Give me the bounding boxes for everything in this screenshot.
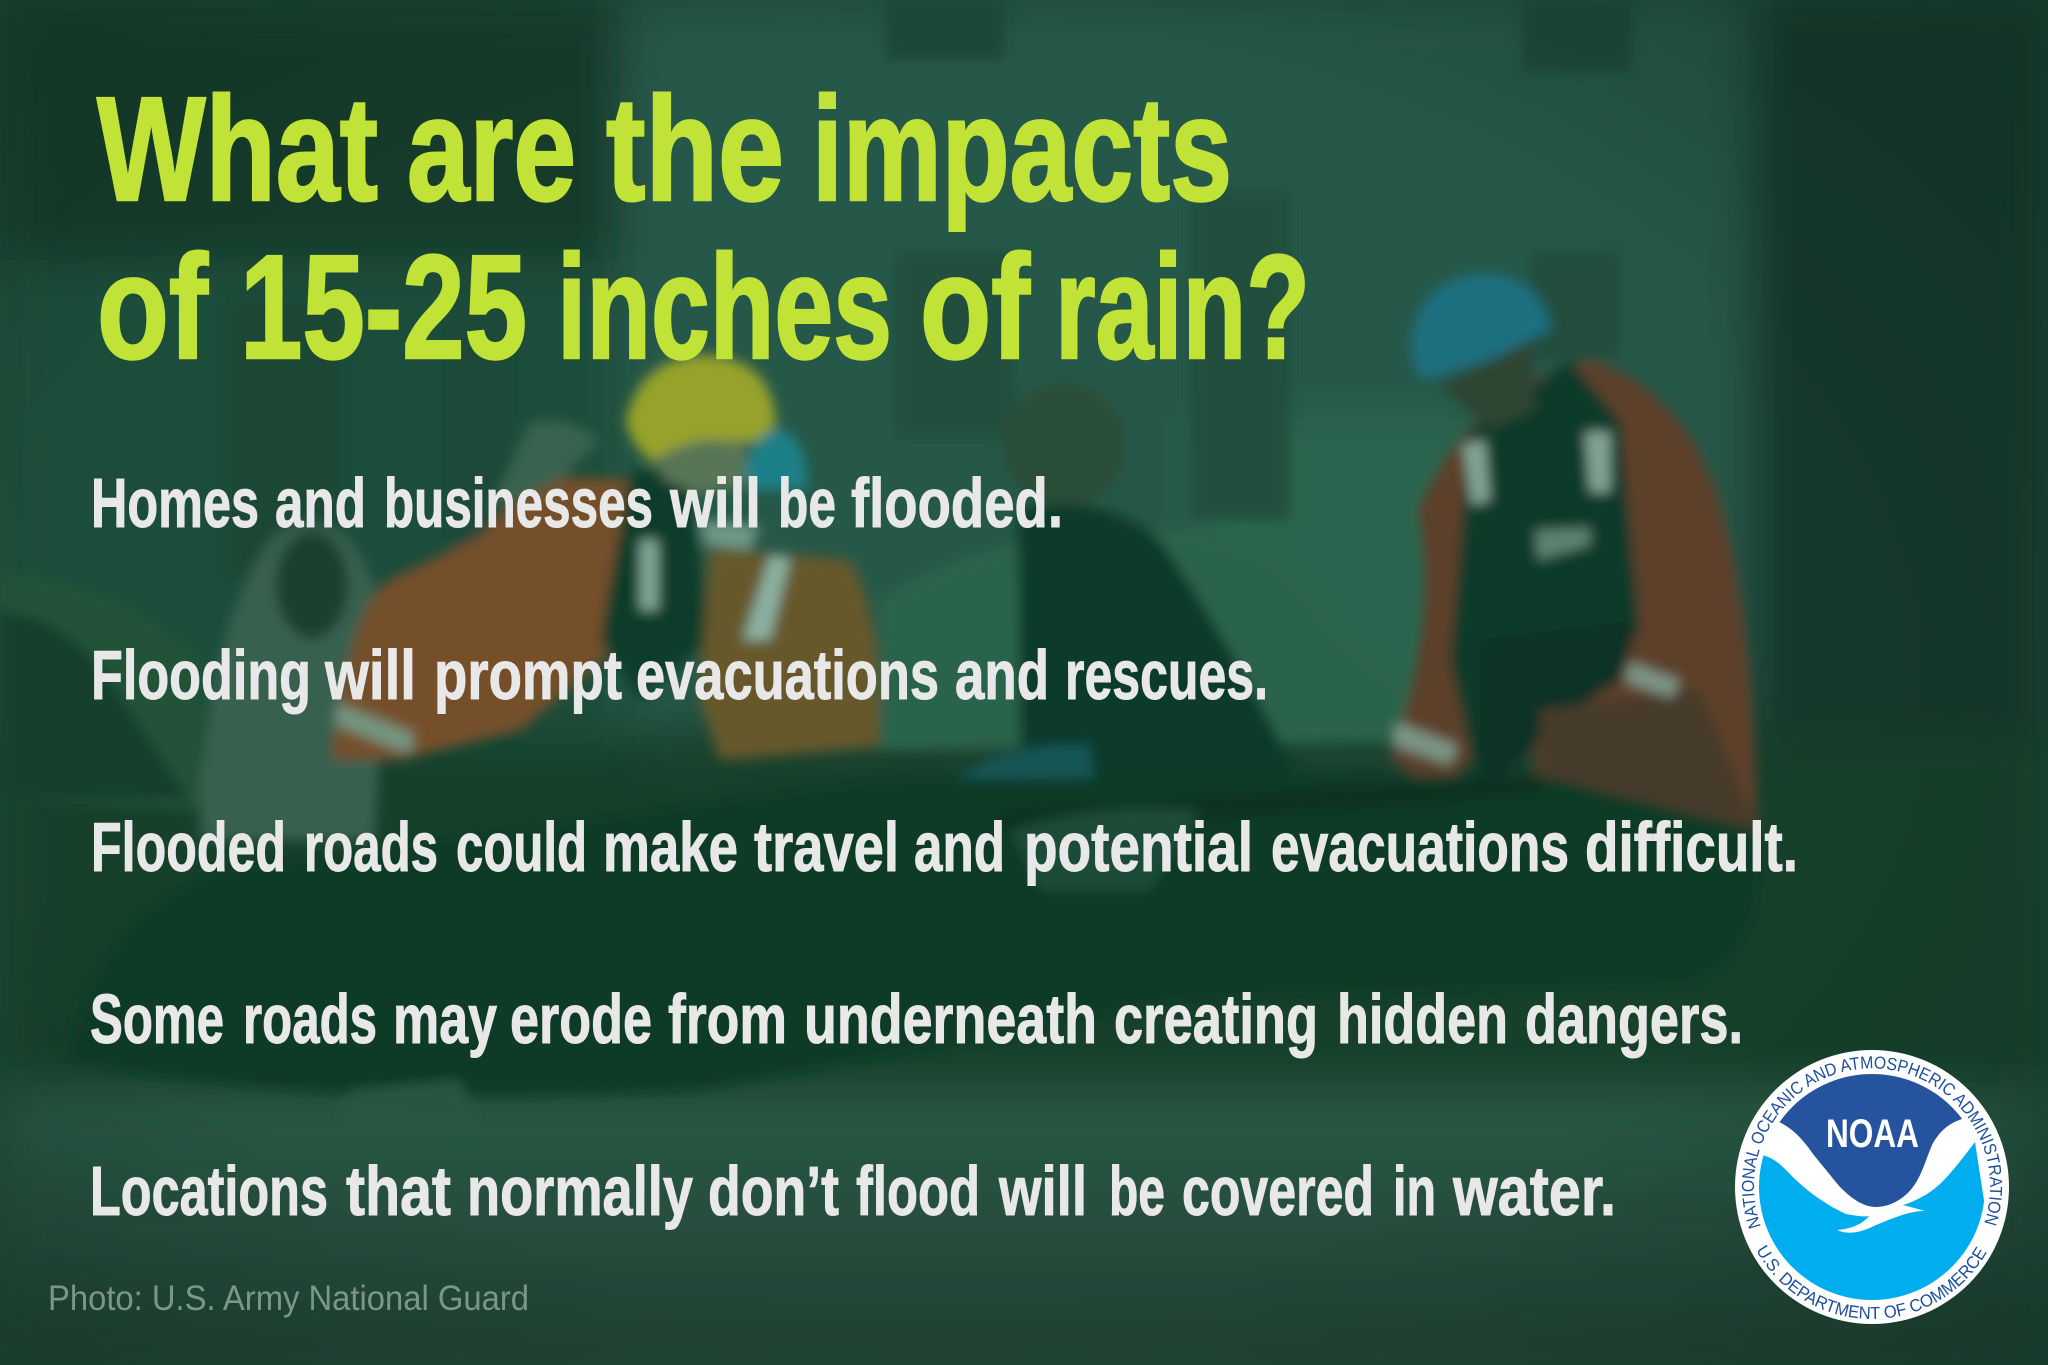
impact statements: flooded. <box>851 464 1063 542</box>
impact statements: creating <box>1114 980 1318 1058</box>
impact statements: evacuations <box>636 636 939 714</box>
impact statements: from <box>668 980 787 1058</box>
impact statements: roads <box>304 808 438 886</box>
impact statements: normally <box>467 1152 693 1230</box>
NOAA logo: NATIONAL OCEANIC AND ATMOSPHERIC ADMINISTRATION <box>1742 1056 2002 1229</box>
title: rain? <box>1055 225 1310 390</box>
title: What <box>97 67 378 232</box>
impact statements: flood <box>856 1152 980 1230</box>
impact statements: and <box>275 464 366 542</box>
impact statements: and <box>914 808 1005 886</box>
second rescuer vest <box>700 547 879 760</box>
impact statements: could <box>456 808 587 886</box>
impact statements: Flooding <box>91 636 311 714</box>
title: the <box>606 67 784 232</box>
raft <box>70 775 1759 1096</box>
NOAA logo: U.S. DEPARTMENT OF COMMERCE <box>1758 1244 1987 1319</box>
title: 15-25 <box>240 225 527 390</box>
woman in boat <box>1002 383 1126 507</box>
impact statements: be <box>778 464 836 542</box>
impact statements: erode <box>510 980 652 1058</box>
windows and doors <box>885 0 1005 60</box>
right rescuer <box>1390 360 1757 830</box>
NOAA logo: NOAA <box>1826 1112 1919 1156</box>
impact statements: businesses <box>384 464 653 542</box>
blue helmet behind <box>745 430 807 490</box>
impact statements: potential <box>1024 808 1253 886</box>
impact statements <box>90 464 1798 1230</box>
blue helmet right <box>1411 273 1551 380</box>
title: are <box>407 67 576 232</box>
impact statements: Homes <box>91 464 259 542</box>
impact statements: evacuations <box>1271 808 1569 886</box>
impact statements: will <box>669 464 761 542</box>
impact statements: difficult. <box>1585 808 1798 886</box>
rescuer in orange <box>333 477 650 760</box>
impact statements: hidden <box>1337 980 1508 1058</box>
seated person in hood <box>200 522 385 840</box>
impact statements: may <box>393 980 497 1058</box>
title: impacts <box>812 67 1232 232</box>
title: inches <box>557 225 892 390</box>
impact statements: travel <box>754 808 899 886</box>
impact statements: rescues. <box>1065 636 1268 714</box>
impact statements: that <box>346 1152 451 1230</box>
impact statements: will <box>998 1152 1087 1230</box>
impact statements: Flooded <box>91 808 286 886</box>
title <box>97 67 1310 390</box>
impact statements: make <box>603 808 738 886</box>
impact statements: will <box>324 636 416 714</box>
title: of <box>97 225 209 390</box>
impact statements: in <box>1393 1152 1436 1230</box>
impact statements: and <box>955 636 1049 714</box>
impact statements: Locations <box>90 1152 328 1230</box>
photo credit: Photo: U.S. Army National Guard <box>48 1279 529 1318</box>
impact statements: covered <box>1182 1152 1374 1230</box>
impact statements: Some <box>90 980 224 1058</box>
NOAA logo <box>1735 1050 2009 1324</box>
title: of <box>920 225 1031 390</box>
impact statements: underneath <box>804 980 1097 1058</box>
impact statements: dangers. <box>1525 980 1743 1058</box>
yellow helmet <box>626 355 776 470</box>
cars <box>880 530 1420 750</box>
impact statements: prompt <box>434 636 622 714</box>
impact statements: roads <box>243 980 377 1058</box>
impact statements: water. <box>1452 1152 1616 1230</box>
impact statements: be <box>1109 1152 1165 1230</box>
impact statements: don’t <box>708 1152 839 1230</box>
